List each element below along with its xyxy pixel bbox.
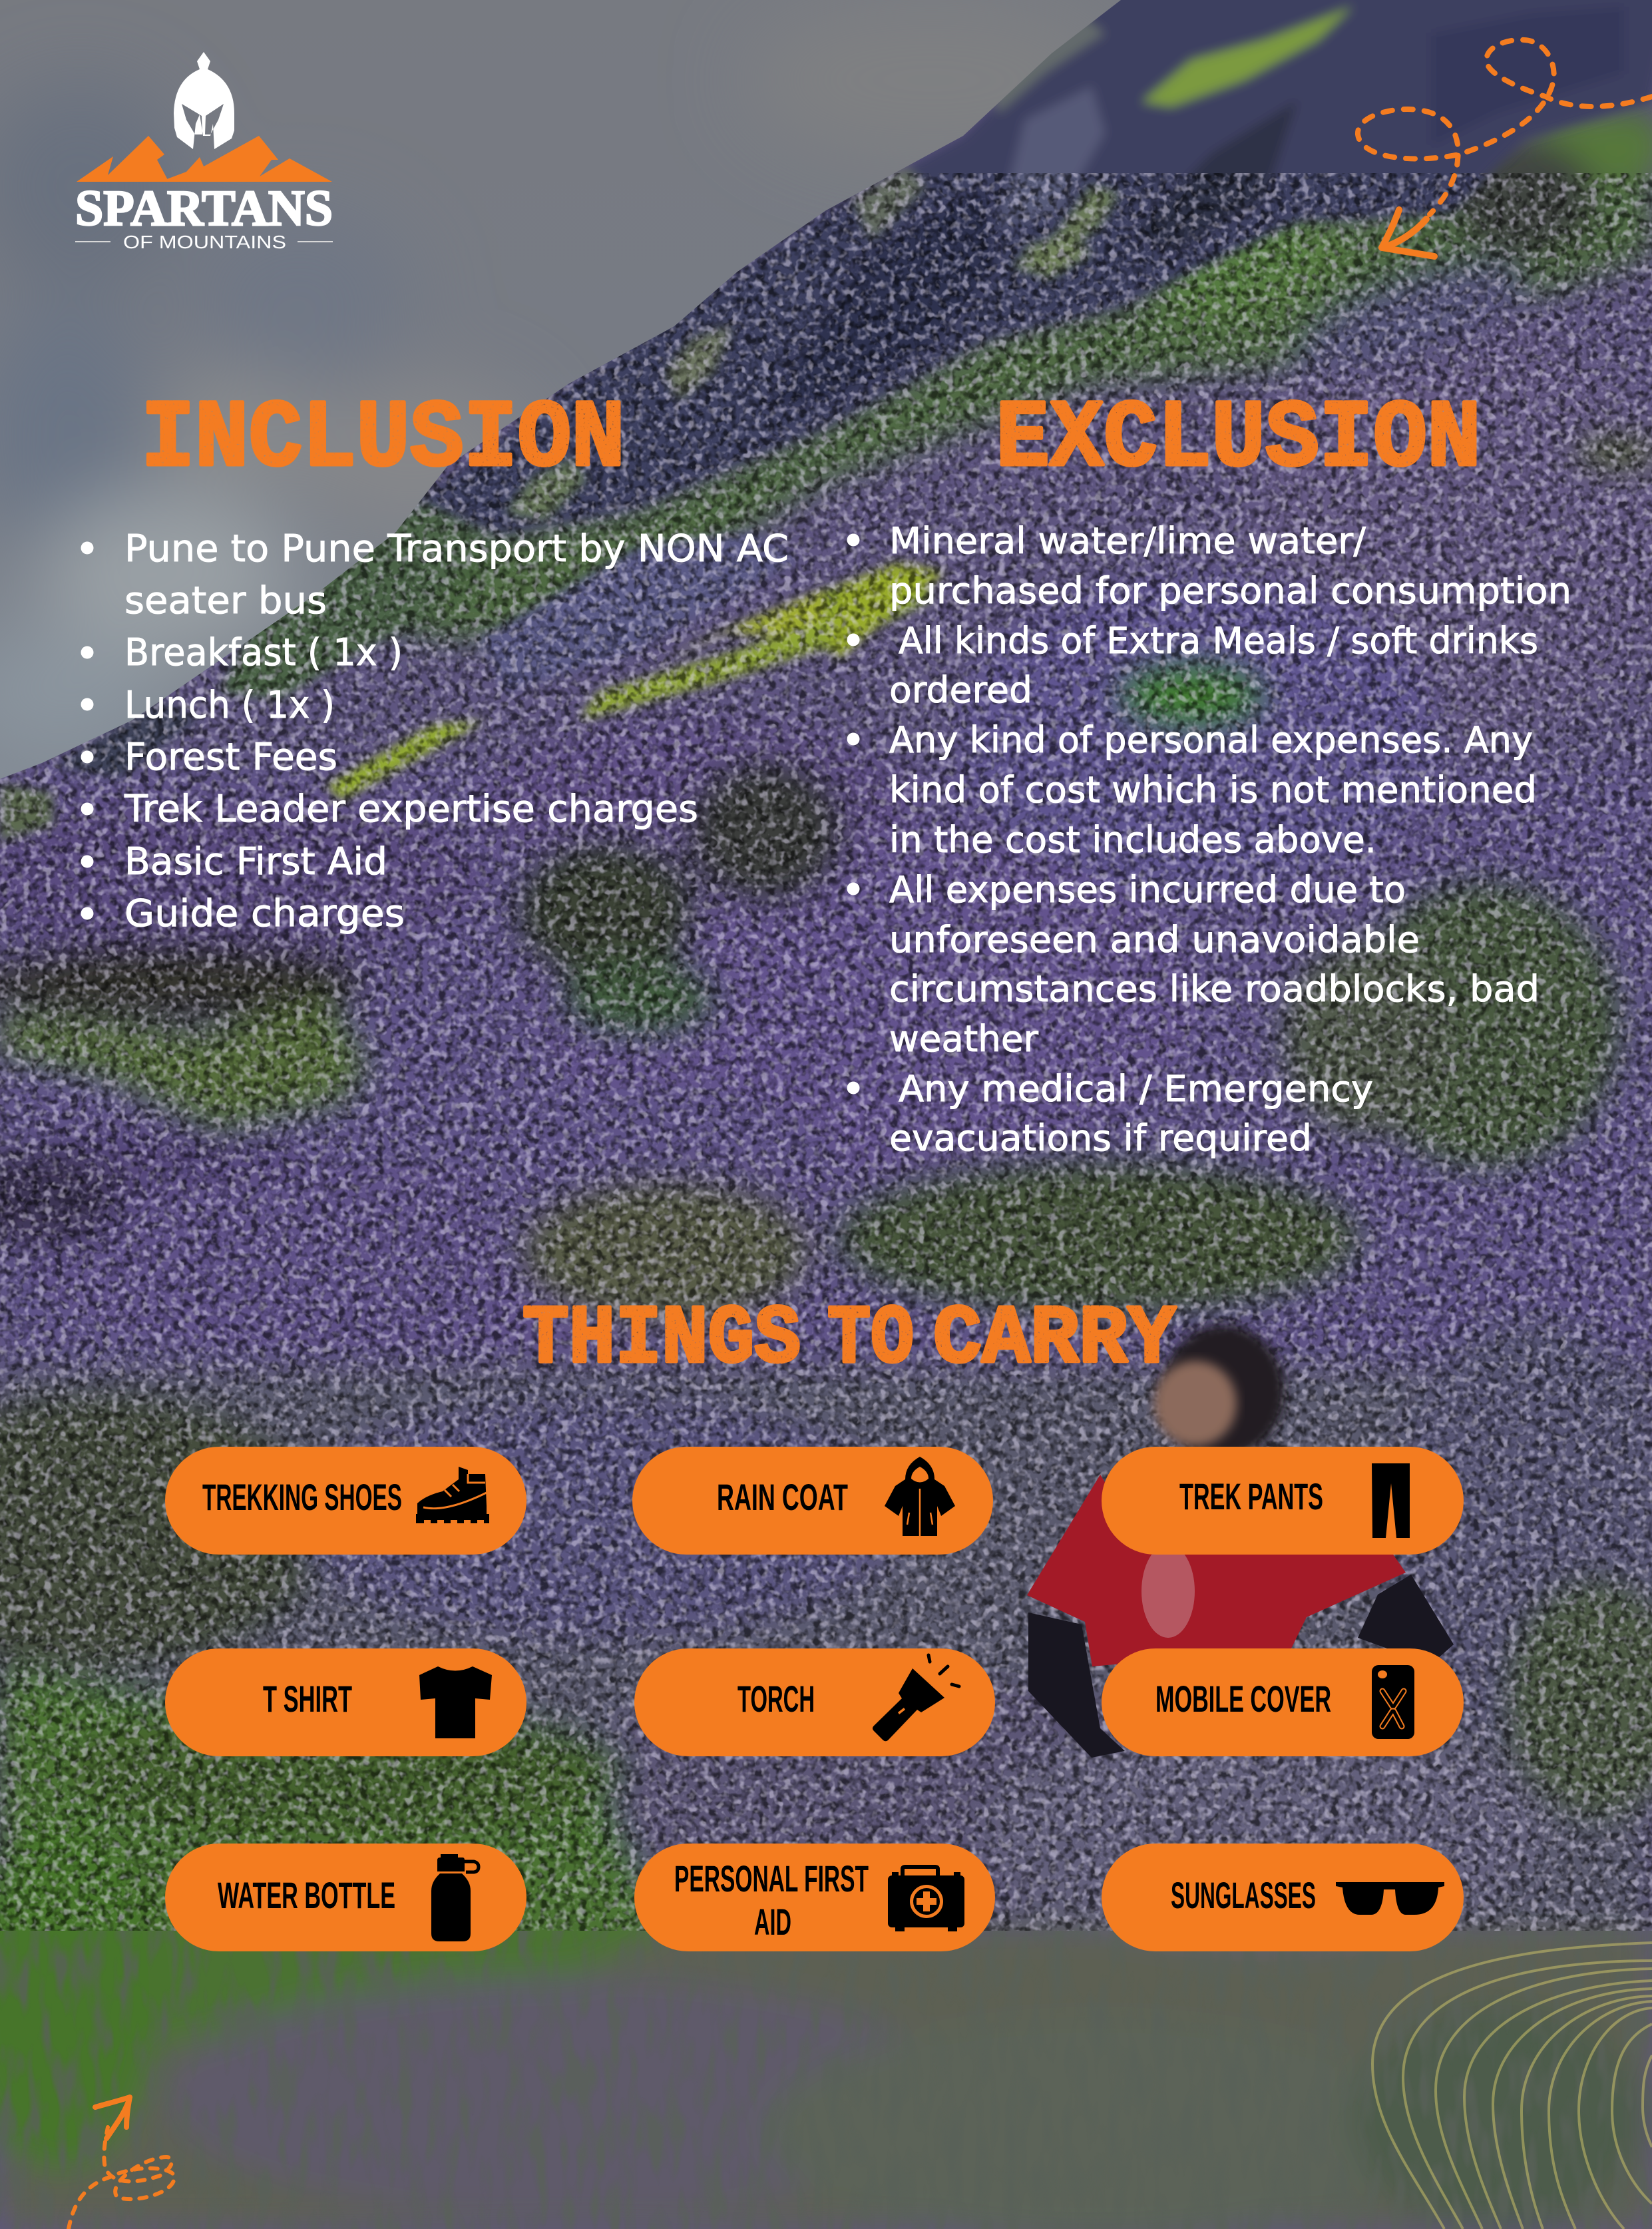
list: inclusions: Lunch ( 1x ) — [124, 684, 335, 727]
pill: torch — [634, 1648, 995, 1756]
list: exclusions: purchased for personal consumption — [889, 570, 1571, 612]
icon: first aid kit — [888, 1867, 964, 1931]
icon: sunglasses — [1336, 1882, 1444, 1915]
heading: EXCLUSION: EXCLUSION — [996, 385, 1481, 493]
pill: trekking shoes: TREKKING SHOES — [202, 1476, 402, 1518]
doodle: dashed looping arrow bottom left — [69, 2097, 174, 2229]
pill: torch: TORCH — [737, 1678, 815, 1720]
list: exclusions: All kinds of Extra Meals / soft drinks — [899, 620, 1538, 662]
list: exclusions: circumstances like roadblocks, bad — [889, 968, 1540, 1010]
pill: personal first aid — [634, 1844, 995, 1951]
list: inclusions: seater bus — [124, 579, 327, 622]
list: exclusions: Mineral water/lime water/ — [889, 520, 1366, 562]
pill: personal first aid: AID — [754, 1901, 791, 1943]
icon: torch — [873, 1655, 959, 1741]
icon: orange mountains — [77, 136, 332, 182]
list: exclusions: Any kind of personal expenses. Any — [889, 719, 1533, 761]
pill: sunglasses: SUNGLASSES — [1171, 1874, 1316, 1916]
doodle: dashed looping arrow top right — [1358, 40, 1652, 256]
pill: mobile cover: MOBILE COVER — [1155, 1678, 1331, 1720]
icon: boot — [416, 1467, 489, 1523]
list: inclusions: Pune to Pune Transport by NON AC — [124, 527, 789, 571]
list: exclusions: ordered — [889, 669, 1032, 711]
list: inclusions: Basic First Aid — [124, 840, 387, 883]
decoration: thin concentric arcs bottom right — [1372, 1943, 1652, 2229]
logo tagline: OF MOUNTAINS — [123, 232, 286, 252]
heading: things to carry: CARRY — [933, 1294, 1177, 1387]
pill: mobile cover — [1102, 1648, 1464, 1756]
list: exclusions — [847, 520, 1571, 1159]
pill: rain coat — [632, 1447, 993, 1555]
pill: t shirt: T SHIRT — [263, 1678, 352, 1720]
icon: t shirt — [419, 1666, 492, 1738]
icon: rain coat — [885, 1457, 955, 1536]
pill: trekking shoes — [165, 1447, 526, 1555]
list: exclusions: Any medical / Emergency — [899, 1068, 1373, 1110]
person — [1027, 1325, 1454, 1758]
list: inclusions: Breakfast ( 1x ) — [124, 631, 403, 674]
pill: water bottle — [165, 1844, 526, 1951]
heading: INCLUSION: INCLUSION — [141, 385, 625, 493]
icon: trek pants — [1372, 1463, 1410, 1538]
pill: t shirt — [165, 1648, 526, 1756]
pill: trek pants: TREK PANTS — [1179, 1475, 1323, 1517]
list: inclusions: Forest Fees — [124, 736, 337, 779]
list: inclusions: Trek Leader expertise charges — [124, 788, 698, 831]
list: exclusions: All expenses incurred due to — [889, 869, 1406, 911]
pill: personal first aid: PERSONAL FIRST — [674, 1858, 869, 1899]
list: exclusions: weather — [889, 1018, 1039, 1060]
list: exclusions: in the cost includes above. — [889, 819, 1376, 861]
pill: sunglasses — [1102, 1844, 1464, 1951]
list: exclusions: evacuations if required — [889, 1117, 1312, 1159]
pill: trek pants — [1102, 1447, 1464, 1555]
pill: water bottle: WATER BOTTLE — [218, 1874, 395, 1916]
list: exclusions: unforeseen and unavoidable — [889, 919, 1420, 961]
pill: rain coat: RAIN COAT — [717, 1476, 848, 1518]
heading: things to carry: TO — [827, 1294, 914, 1387]
icon: mobile cover — [1372, 1665, 1414, 1739]
heading: things to carry: THINGS — [522, 1294, 801, 1387]
logo wordmark: SPARTANS — [75, 180, 333, 236]
icon: water bottle — [431, 1854, 479, 1941]
icon: spartan helmet — [174, 52, 234, 149]
heading: things to carry — [522, 1294, 1177, 1387]
list: exclusions: kind of cost which is not mentioned — [889, 769, 1537, 811]
logo: Spartans of Mountains — [75, 52, 333, 252]
list: inclusions — [81, 527, 789, 935]
list: inclusions: Guide charges — [124, 892, 405, 935]
